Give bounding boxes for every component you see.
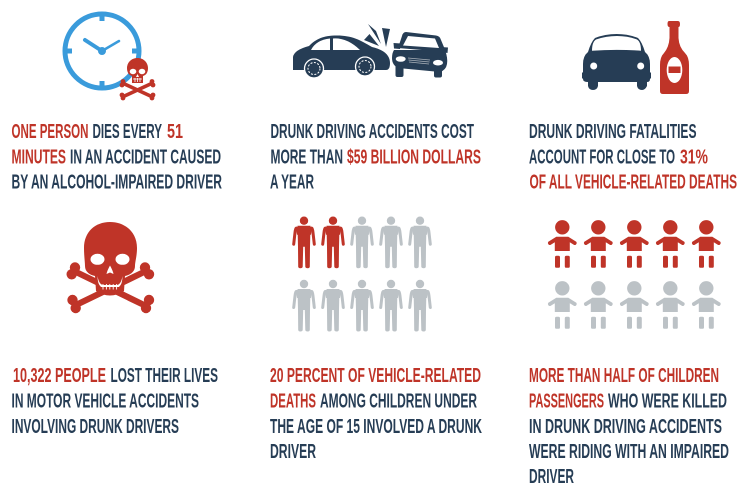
- text: accidents cost: DRUNK DRIVING ACCIDENTS COST: [270, 120, 474, 143]
- text: accidents cost: $59 BILLION DOLLARS: [347, 146, 481, 168]
- text: one person dies every 51 minutes: [12, 120, 222, 194]
- text: children passengers: [529, 364, 729, 488]
- text: children passengers: PASSENGERS: [529, 390, 604, 412]
- panel: one person dies every 51 minutes: [12, 13, 222, 194]
- text: 10,322 people: 10,322 PEOPLE: [13, 364, 106, 387]
- panel: 31% of vehicle-related deaths: [529, 21, 737, 194]
- panel: 20 percent of child deaths: [270, 216, 482, 463]
- text: 20 percent: DEATHS: [270, 390, 316, 412]
- icon: two cars crashing: [293, 24, 448, 78]
- icon: beer bottle: [660, 21, 689, 94]
- text: one person dies every 51 minutes: ONE PERSON: [12, 120, 88, 143]
- chart: pictogram of ten people, two red: [294, 216, 430, 332]
- icon: large skull and crossbones: [66, 222, 154, 313]
- panel: more than half of child passengers: [529, 220, 729, 488]
- panel: accidents cost $59 billion: [270, 24, 481, 194]
- icon: car front view: [582, 34, 651, 90]
- text: fatalities share: [529, 120, 737, 194]
- text: 20 percent: THE AGE OF 15 INVOLVED A DRUNK: [270, 415, 482, 438]
- text: accidents cost: MORE THAN: [270, 146, 343, 168]
- text: one person dies every 51 minutes: 51: [167, 120, 183, 143]
- text: accidents cost: A YEAR: [270, 170, 314, 194]
- text: 20 percent: 20 PERCENT OF VEHICLE-RELATED: [270, 364, 481, 387]
- text: 10,322 people: IN MOTOR VEHICLE ACCIDENTS: [12, 390, 199, 412]
- text: 10,322 people: LOST THEIR LIVES: [110, 364, 218, 387]
- text: one person dies every 51 minutes: BY AN ALCOHOL-IMPAIRED DRIVER: [12, 170, 222, 194]
- text: children passengers: DRIVER: [529, 465, 574, 488]
- panel: 10,322 people: [12, 222, 218, 438]
- text: one person dies every 51 minutes: DIES EVERY: [92, 120, 162, 143]
- chart: pictogram of ten children, five red: [548, 220, 721, 329]
- text: 10,322 people: INVOLVING DRUNK DRIVERS: [12, 415, 179, 438]
- icon: blue clock: [64, 13, 140, 89]
- text: 20 percent: [270, 364, 482, 463]
- text: accidents cost: [270, 120, 481, 194]
- text: fatalities share: 31%: [680, 146, 708, 168]
- text: 20 percent: AMONG CHILDREN UNDER: [320, 390, 477, 412]
- text: 10,322 people: [12, 364, 218, 438]
- text: one person dies every 51 minutes: IN AN ACCIDENT CAUSED: [70, 146, 221, 168]
- icon: small skull and crossbones: [120, 58, 155, 100]
- text: 20 percent: DRIVER: [270, 440, 316, 463]
- text: one person dies every 51 minutes: MINUTES: [12, 146, 66, 168]
